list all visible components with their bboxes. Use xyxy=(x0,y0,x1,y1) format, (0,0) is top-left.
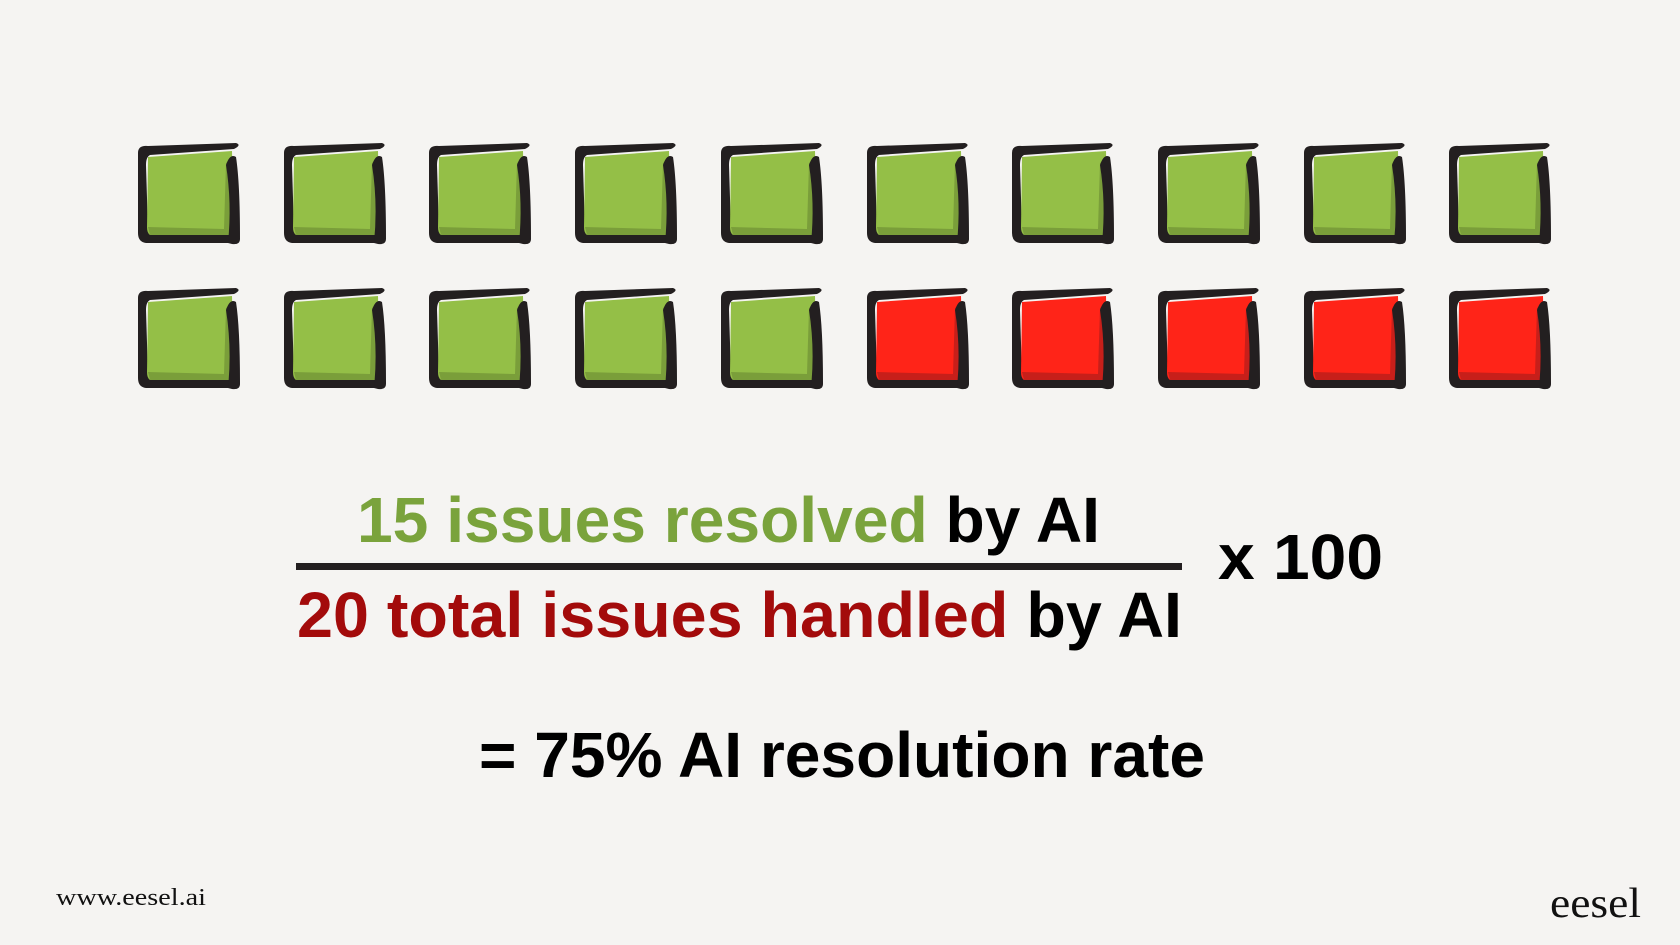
multiplier text: x 100 xyxy=(1218,521,1383,593)
fraction line xyxy=(296,563,1182,570)
denominator text: 20 total issues handled by AI xyxy=(297,579,1182,651)
result text: = 75% AI resolution rate xyxy=(479,719,1205,791)
footer url: www.eesel.ai xyxy=(56,885,206,911)
numerator text: 15 issues resolved by AI xyxy=(357,484,1100,556)
icon grid: row 2 green and red squares xyxy=(138,288,1551,389)
logo eesel: eesel xyxy=(1550,881,1641,927)
icon grid: row 1 green squares xyxy=(138,143,1551,244)
